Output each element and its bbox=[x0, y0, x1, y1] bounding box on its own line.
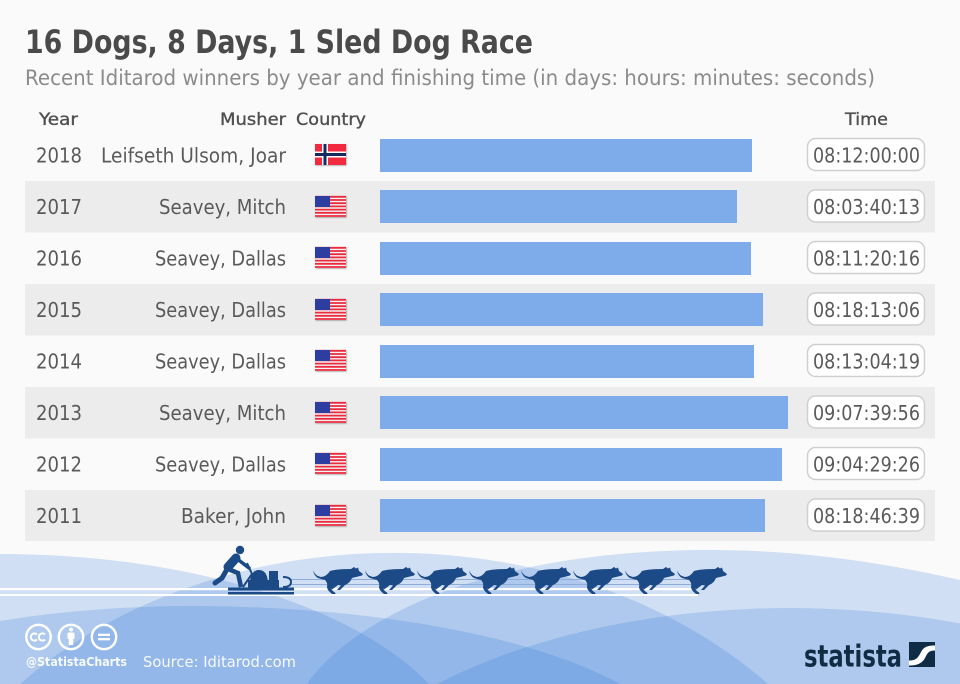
icon: musher on sled bbox=[215, 546, 294, 594]
title: 16 Dogs, 8 Days, 1 Sled Dog Race bbox=[25, 23, 533, 61]
column headers: Musher bbox=[220, 110, 286, 130]
row: 2017 bbox=[25, 181, 935, 232]
icon: USA flag bbox=[315, 453, 346, 474]
icon: USA flag bbox=[315, 196, 346, 217]
handle text: @StatistaCharts bbox=[26, 654, 127, 669]
row: 2012: Seavey, Dallas bbox=[155, 452, 286, 476]
row: 2014: 08:13:04:19 bbox=[813, 350, 920, 374]
row: 2014 bbox=[36, 344, 924, 378]
row: 2013 bbox=[25, 387, 935, 438]
column headers: Time bbox=[844, 110, 888, 130]
row: 2018 bbox=[36, 138, 924, 172]
row: 2018: 08:12:00:00 bbox=[813, 144, 920, 168]
snow track lines bbox=[0, 580, 700, 596]
column headers: Year bbox=[38, 110, 78, 130]
statista logo: statista bbox=[804, 640, 902, 674]
row: 2013: 09:07:39:56 bbox=[813, 401, 920, 425]
row: 2012: 2012 bbox=[36, 452, 82, 476]
icon: USA flag bbox=[315, 505, 346, 526]
row: 2018: 2018 bbox=[36, 144, 82, 168]
background: snowy hills bbox=[0, 550, 960, 684]
row: 2016 bbox=[36, 242, 924, 275]
row: 2015: 2015 bbox=[36, 298, 82, 322]
icon: USA flag bbox=[315, 402, 346, 423]
row: 2011: Baker, John bbox=[181, 504, 286, 528]
row: 2013: Seavey, Mitch bbox=[159, 401, 286, 425]
row: 2015 bbox=[25, 284, 935, 336]
row: 2012 bbox=[36, 448, 924, 481]
column headers bbox=[38, 110, 888, 130]
row: 2016: Seavey, Dallas bbox=[155, 246, 286, 270]
row: 2014: Seavey, Dallas bbox=[155, 350, 286, 374]
icon: sled dog team bbox=[313, 567, 727, 594]
row: 2018: Leifseth Ulsom, Joar bbox=[101, 144, 287, 168]
row: 2014: 2014 bbox=[36, 350, 82, 374]
subtitle: Recent Iditarod winners by year and finishing time (in days: hours: minutes: seconds) bbox=[25, 66, 875, 91]
icon: USA flag bbox=[315, 247, 346, 268]
source text: Source: Iditarod.com bbox=[143, 653, 296, 671]
row: 2017: Seavey, Mitch bbox=[159, 195, 286, 219]
icon: Norway flag bbox=[315, 144, 346, 165]
row: 2015: 08:18:13:06 bbox=[813, 298, 920, 322]
row: 2017: 08:03:40:13 bbox=[813, 195, 920, 219]
row: 2011: 08:18:46:39 bbox=[813, 504, 920, 528]
row: 2016: 2016 bbox=[36, 246, 82, 270]
icon: creative commons licence badges bbox=[26, 625, 116, 649]
row: 2011 bbox=[25, 490, 935, 541]
row: 2012: 09:04:29:26 bbox=[813, 452, 920, 476]
column headers: Country bbox=[296, 110, 366, 130]
row: 2011: 2011 bbox=[36, 504, 82, 528]
row: 2016: 08:11:20:16 bbox=[813, 246, 920, 270]
row: 2017: 2017 bbox=[36, 195, 82, 219]
row: 2015: Seavey, Dallas bbox=[155, 298, 286, 322]
icon: USA flag bbox=[315, 350, 346, 371]
icon: USA flag bbox=[315, 299, 346, 320]
row: 2013: 2013 bbox=[36, 401, 82, 425]
